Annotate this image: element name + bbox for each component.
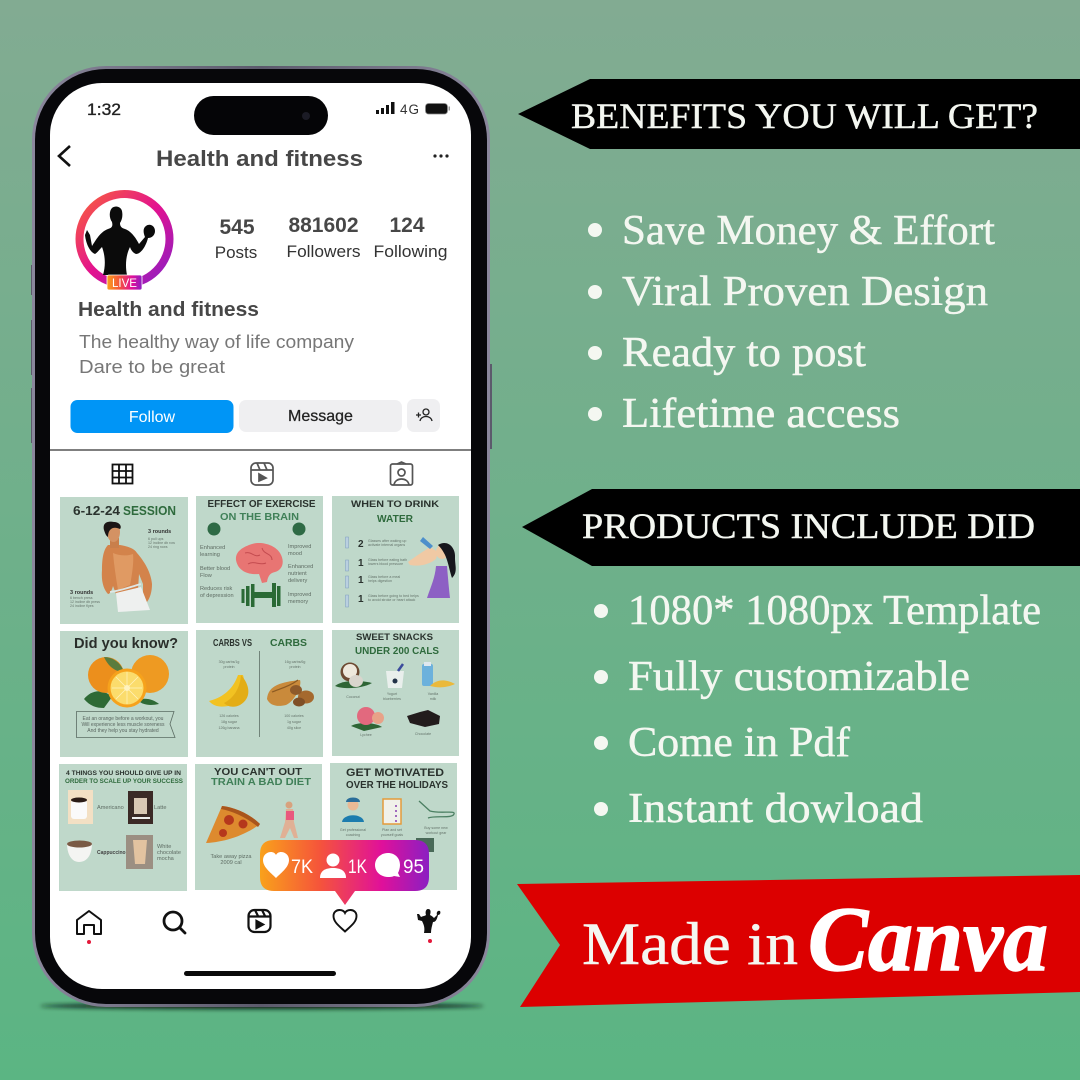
post: get motivated over the holidays: yourself goals (381, 833, 403, 837)
post: sweet snacks under 200 cals: Coconut (346, 695, 360, 699)
icon: home (77, 911, 101, 934)
post: when to drink water: WHEN TO DRINK (351, 499, 439, 510)
post: 4 things to give up: chocolate (157, 850, 181, 856)
post: when to drink water: activate internal organs (368, 543, 405, 547)
post: carbs vs carbs: 126 calories (219, 714, 239, 718)
post: 4 things to give up: Americano (97, 805, 124, 811)
post: when to drink water: Glass before a meal (368, 575, 400, 579)
post: sweet snacks under 200 cals: Vanilla (428, 692, 438, 696)
post: sweet snacks under 200 cals: milk (430, 697, 436, 701)
notification bubble: 1K (348, 857, 367, 878)
post: 6-12-24 session: 6 pull ups (148, 537, 164, 541)
icon: pizza slice (206, 806, 260, 843)
notification bubble (260, 840, 429, 905)
post: get motivated over the holidays: GET MOTIVATED (346, 767, 444, 779)
post: effect of exercise on the brain: memory (288, 599, 308, 605)
icon: comment (375, 853, 400, 877)
icon: grid tab (112, 464, 132, 484)
home indicator (184, 971, 336, 976)
status bar: 4G (400, 102, 419, 117)
post: sweet snacks under 200 cals: SWEET SNACKS (356, 632, 433, 643)
icon: bread and nuts (267, 680, 314, 706)
icon: clipboard (383, 799, 401, 824)
post: carbs vs carbs: 1g sugar (287, 720, 302, 724)
post: get motivated over the holidays: Buy some new (424, 826, 448, 830)
profile bio: Dare to be great (79, 357, 225, 377)
post: sweet snacks under 200 cals: Yogurt (387, 692, 397, 696)
profile stats: 881602 (288, 214, 359, 237)
dynamic island (194, 96, 328, 135)
profile tabs (112, 462, 412, 485)
post: 4 things to give up: 4 THINGS YOU SHOULD GIVE UP IN (66, 770, 181, 777)
benefits list (588, 208, 995, 437)
post: effect of exercise on the brain: EFFECT OF EXERCISE (208, 499, 316, 510)
post: 6-12-24 session: SESSION (123, 504, 176, 518)
post: did you know: And they help you stay hydrated (87, 728, 159, 734)
live badge: LIVE (112, 278, 137, 290)
icon: exercising woman (280, 802, 298, 838)
post: effect of exercise on the brain: Improved (288, 592, 311, 598)
post: 4 things to give up: ORDER TO SCALE UP YOUR SUCCESS (65, 778, 184, 785)
products list (594, 588, 1041, 832)
profile stats: Posts (215, 243, 257, 262)
banner: made in canva: Made in (582, 911, 798, 977)
post: when to drink water: helps digestion (368, 579, 392, 583)
icon: person (320, 854, 346, 878)
post: did you know: Will experience less muscle soreness (81, 722, 165, 728)
icon: cappuccino (67, 840, 92, 862)
benefits list: Viral Proven Design (622, 269, 988, 315)
post: you can't out train a bad diet: Take away pizza (210, 854, 252, 860)
post: carbs vs carbs: 18g sugar (221, 720, 238, 724)
post: get motivated over the holidays: Plan and set (382, 828, 402, 832)
post: get motivated over the holidays (330, 763, 457, 890)
icon: fit man (102, 522, 152, 612)
post: get motivated over the holidays: workout gear (426, 831, 447, 835)
post: when to drink water: Glass before eating bath (368, 558, 407, 562)
post: when to drink water: 1 (358, 575, 364, 586)
post: did you know: Eat an orange before a workout, you (83, 716, 164, 722)
icon: dumbbell (242, 583, 280, 607)
benefits list: Ready to post (622, 330, 866, 376)
post: get motivated over the holidays: OVER THE HOLIDAYS (346, 780, 448, 791)
icon: add person (416, 409, 432, 421)
icon: reels (248, 910, 270, 932)
icon: chocolate (407, 710, 440, 727)
profile bio: Health and fitness (78, 299, 259, 321)
post: get motivated over the holidays: Get professional (340, 828, 366, 832)
icon: oranges (84, 655, 169, 708)
icon: bananas (209, 675, 248, 707)
icon: vanilla milk (422, 662, 455, 687)
post: 6-12-24 session: 6 bench press (70, 596, 93, 600)
icon: tagged tab (390, 462, 412, 485)
icon: coconut (335, 662, 372, 688)
profile stats: Followers (286, 242, 360, 261)
post: when to drink water: WATER (377, 514, 413, 525)
post: sweet snacks under 200 cals: blueberries (383, 697, 401, 701)
post: 4 things to give up: Latte (154, 805, 166, 811)
post: 4 things to give up: White (157, 844, 171, 850)
post: when to drink water (332, 496, 459, 623)
post: get motivated over the holidays: coaching (346, 833, 360, 837)
post: when to drink water: to avoid stroke or heart attack (368, 598, 416, 602)
notification bubble: 95 (403, 857, 424, 878)
post: did you know: Did you know? (74, 636, 178, 652)
post: carbs vs carbs: protein (290, 665, 300, 669)
icon: search (164, 912, 185, 933)
post: effect of exercise on the brain: learning (200, 552, 220, 558)
post: effect of exercise on the brain: Better blood (200, 566, 230, 572)
post: 4 things to give up: Cappuccino (97, 850, 126, 856)
post: 6-12-24 session: 24 ring rows (148, 545, 168, 549)
icon: jump rope (419, 801, 454, 818)
post: effect of exercise on the brain: nutrient (288, 571, 307, 577)
post: carbs vs carbs: CARBS VS (213, 637, 252, 649)
post: effect of exercise on the brain: Enhanced (288, 564, 313, 570)
icon: reels tab (251, 463, 273, 485)
post: sweet snacks under 200 cals: Chocolate (415, 732, 431, 736)
phone mockup (31, 66, 492, 1009)
banner: made in canva: Canva (808, 888, 1048, 990)
post: 6-12-24 session: 3 rounds (148, 529, 171, 535)
bottom navigation (77, 909, 440, 976)
icon: heart outline (334, 910, 356, 932)
profile stats: 124 (389, 214, 425, 237)
profile avatar (80, 194, 170, 290)
post: when to drink water: Glasses after waking up (368, 539, 406, 543)
post: 6-12-24 session: 12 incline db row (148, 541, 175, 545)
benefits list: Lifetime access (622, 391, 900, 437)
profile buttons: Follow (129, 409, 176, 426)
post: did you know (60, 631, 188, 757)
banner: products: PRODUCTS INCLUDE DID (582, 506, 1035, 546)
icon: brain (236, 543, 283, 583)
post: when to drink water: 1 (358, 594, 364, 605)
banner: products (522, 489, 1080, 566)
icon: coach (342, 798, 364, 822)
icon: fitness silhouette (85, 207, 155, 275)
post: you can't out train a bad diet: TRAIN A BAD DIET (211, 777, 311, 788)
profile buttons: Message (288, 408, 353, 425)
post: carbs vs carbs: protein (224, 665, 234, 669)
icon: white chocolate mocha (126, 835, 153, 869)
benefits list: Save Money & Effort (622, 208, 995, 254)
icon: woman drinking water (408, 537, 456, 598)
products list: Come in Pdf (628, 720, 850, 766)
post: effect of exercise on the brain: Reduces risk (200, 586, 233, 592)
post: 6-12-24 session (60, 497, 188, 624)
post: sweet snacks under 200 cals: Lychee (360, 733, 372, 737)
post: 6-12-24 session: 3 rounds (70, 590, 93, 596)
icon: americano (68, 790, 93, 824)
post: effect of exercise on the brain: Enhanced (200, 545, 225, 551)
post: effect of exercise on the brain (196, 496, 323, 623)
post: carbs vs carbs: 16g carbs/6g (285, 660, 305, 664)
profile bio: The healthy way of life company (79, 332, 354, 352)
post: carbs vs carbs: 30g carbs/1g (219, 660, 239, 664)
signal icon (376, 102, 394, 114)
products list: 1080* 1080px Template (628, 588, 1041, 634)
post: 4 things to give up: mocha (157, 856, 175, 862)
products list: Instant dowload (628, 786, 923, 832)
banner: benefits (518, 79, 1080, 149)
post: carbs vs carbs: 126g banana (218, 726, 240, 730)
post: you can't out train a bad diet: 2009 cal (220, 860, 242, 866)
profile header (59, 146, 449, 171)
profile bio (78, 299, 354, 377)
post: effect of exercise on the brain: Improved (288, 544, 311, 550)
post: carbs vs carbs: CARBS (270, 637, 307, 649)
post: effect of exercise on the brain: delivery (288, 578, 307, 584)
post: sweet snacks under 200 cals: UNDER 200 CALS (355, 646, 439, 657)
post: effect of exercise on the brain: mood (288, 551, 302, 557)
post: effect of exercise on the brain: of depression (200, 593, 234, 599)
banner: benefits: BENEFITS YOU WILL GET? (571, 96, 1038, 136)
post: 6-12-24 session: 6-12-24 (73, 504, 120, 518)
post: 4 things to give up (59, 764, 187, 891)
profile stats (215, 214, 448, 262)
icon: profile silhouette (417, 909, 440, 933)
post: when to drink water: Glass before going to bed helps (368, 594, 419, 598)
post: when to drink water: 1 (358, 558, 364, 569)
battery icon (426, 104, 450, 114)
post: you can't out train a bad diet: YOU CAN'T OUT (214, 767, 302, 778)
products list: Fully customizable (628, 654, 970, 700)
post: carbs vs carbs: 40g slice (287, 726, 301, 730)
post: 6-12-24 session: 24 incline flyes (70, 604, 94, 608)
icon: heart (263, 852, 289, 878)
status bar: 1:32 (87, 101, 121, 119)
icon: yogurt (386, 664, 404, 688)
post: effect of exercise on the brain: Flow (200, 573, 213, 579)
icon: latte (128, 791, 153, 824)
profile stats: 545 (219, 216, 255, 239)
icon: gear bag behind bubble (416, 838, 434, 852)
notification bubble: 7K (291, 857, 313, 878)
status bar (87, 96, 450, 135)
icon: lychee (351, 707, 384, 731)
post: carbs vs carbs (196, 630, 323, 757)
profile stats: Following (374, 242, 448, 261)
post: carbs vs carbs: 100 calories (284, 714, 304, 718)
banner: made in canva (517, 875, 1080, 1007)
post: you can't out train a bad diet (195, 764, 322, 890)
profile buttons (70, 399, 440, 433)
post: effect of exercise on the brain: ON THE BRAIN (220, 512, 299, 523)
post: when to drink water: 2 (358, 539, 364, 550)
profile header: Health and fitness (156, 146, 363, 171)
post: when to drink water: lowers blood pressure (368, 562, 403, 566)
post: 6-12-24 session: 12 incline db press (70, 600, 100, 604)
post: sweet snacks under 200 cals (332, 630, 459, 756)
